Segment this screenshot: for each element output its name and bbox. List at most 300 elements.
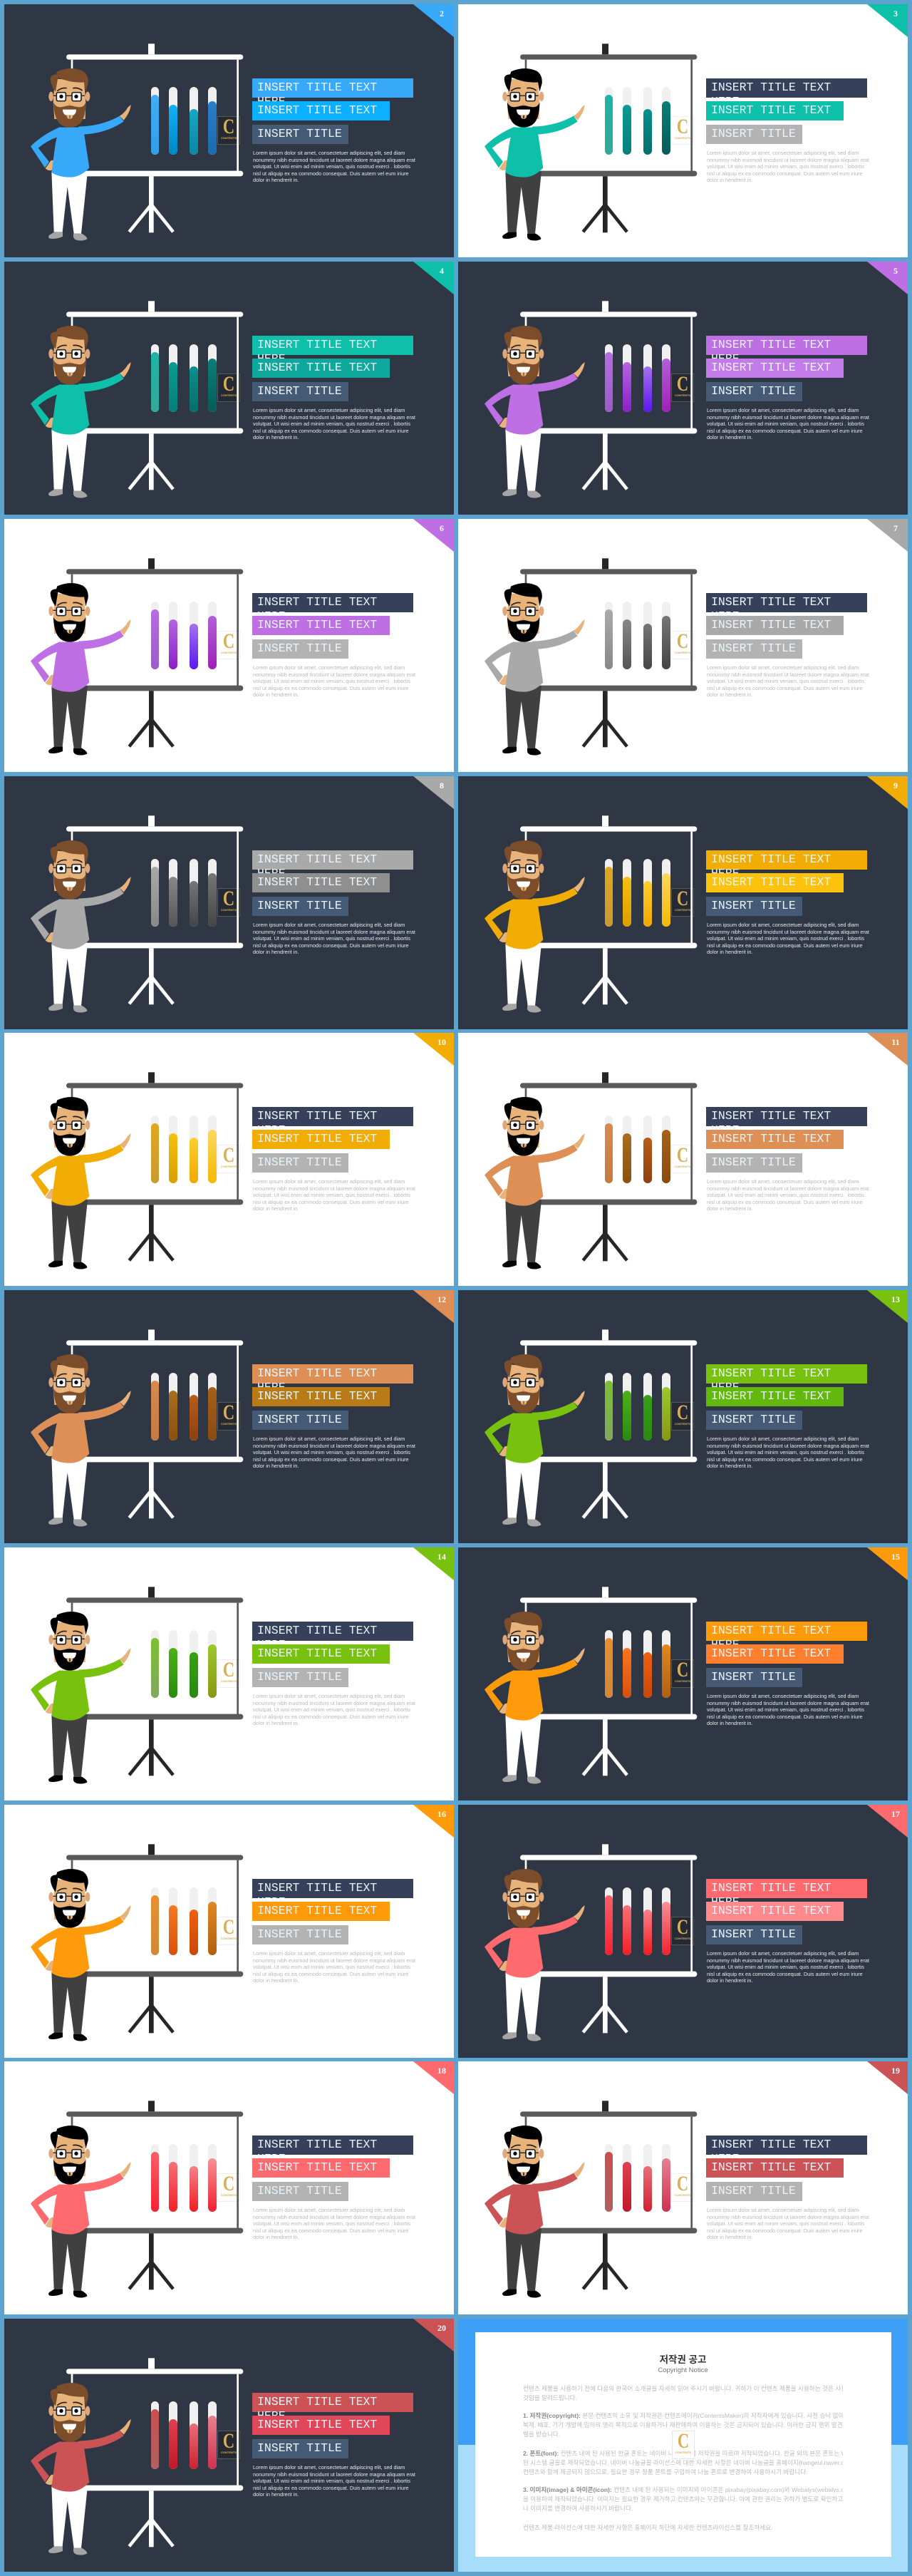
heading bar 3 <box>252 2439 348 2458</box>
bar chart <box>605 1887 670 1955</box>
body text: nonummy nibh euismod tincidunt ut laoreet dolore magna aliquam erat <box>253 2214 415 2220</box>
body text: nonummy nibh euismod tincidunt ut laoreet dolore magna aliquam erat <box>707 929 869 935</box>
body text: dolor in hendrerit in. <box>707 949 752 955</box>
bar chart <box>605 2144 670 2212</box>
corner tag: page 12 <box>413 1290 454 1323</box>
corner tag: page 7: 7 <box>893 523 898 533</box>
illustration: presenter at screen <box>484 301 697 498</box>
body text: dolor in hendrerit in. <box>253 2234 299 2240</box>
body text: Lorem ipsum dolor sit amet, consectetuer adipiscing elit, sed diam <box>253 2464 405 2471</box>
logo badge <box>217 1145 240 1173</box>
body text: nisl ut aliquip ex ea commodo consequat. Duis autem vel eum iriure <box>253 1971 409 1977</box>
logo badge <box>671 631 694 659</box>
heading bar 2 <box>252 359 390 378</box>
corner tag: page 19 <box>867 2061 908 2094</box>
body text: nonummy nibh euismod tincidunt ut laoreet dolore magna aliquam erat <box>253 1700 415 1706</box>
heading bar 1: INSERT TITLE TEXT HERE <box>257 595 377 623</box>
illustration: presenter at screen <box>458 1290 908 1543</box>
logo badge: CONTENTS <box>221 2451 237 2454</box>
heading bar 3: INSERT TITLE <box>711 1413 796 1426</box>
heading bar 3: INSERT TITLE <box>711 1927 796 1941</box>
logo badge <box>217 888 240 917</box>
logo badge <box>671 1659 694 1688</box>
heading bar 1 <box>252 2393 413 2412</box>
heading bar 1 <box>252 1107 413 1126</box>
heading bar 3 <box>706 2182 802 2201</box>
white notice card <box>475 2332 891 2557</box>
logo badge: CONTENTS <box>221 651 237 654</box>
illustration: presenter at screen <box>484 1072 697 1269</box>
body text <box>707 1436 869 1470</box>
body text: volutpat. Ut wisi enim ad minim veniam, quis nostrud exerci . lobortis <box>253 163 410 170</box>
heading bar 1: INSERT TITLE TEXT HERE <box>711 852 831 880</box>
illustration: presenter at screen <box>31 43 244 241</box>
body text: dolor in hendrerit in. <box>253 1977 299 1984</box>
corner tag: page 20: 20 <box>437 2323 446 2333</box>
corner tag: page 16 <box>413 1805 454 1838</box>
logo badge: CONTENTS <box>221 1422 237 1426</box>
heading bar 2 <box>706 1130 844 1149</box>
body text: Lorem ipsum dolor sit amet, consectetuer adipiscing elit, sed diam <box>253 1436 405 1442</box>
heading bar 1: INSERT TITLE TEXT HERE <box>711 1881 831 1909</box>
body text: volutpat. Ut wisi enim ad minim veniam, quis nostrud exerci . lobortis <box>253 2478 410 2484</box>
heading bar 2: INSERT TITLE TEXT <box>257 1389 377 1403</box>
heading bar 1: INSERT TITLE TEXT HERE <box>711 338 831 366</box>
panel: slide 19 <box>458 2061 908 2314</box>
body text: volutpat. Ut wisi enim ad minim veniam, quis nostrud exerci . lobortis <box>253 1706 410 1713</box>
heading bar 3 <box>706 1411 802 1430</box>
body text <box>253 1693 415 1727</box>
heading bar 3: INSERT TITLE <box>711 1155 796 1169</box>
heading bar 2: INSERT TITLE TEXT <box>257 103 377 117</box>
heading bar 1: INSERT TITLE TEXT HERE <box>257 338 377 366</box>
body text <box>253 664 415 698</box>
heading bar 2 <box>252 1644 390 1664</box>
heading bar 1 <box>706 1879 867 1898</box>
heading bar 3: INSERT TITLE <box>257 642 342 655</box>
body text: Lorem ipsum dolor sit amet, consectetuer adipiscing elit, sed diam <box>707 1436 859 1442</box>
heading bar 3: INSERT TITLE <box>257 127 342 140</box>
heading bar 1: INSERT TITLE TEXT HERE <box>257 2395 377 2423</box>
heading bar 3 <box>252 2182 348 2201</box>
body text: nonummy nibh euismod tincidunt ut laoreet dolore magna aliquam erat <box>253 671 415 678</box>
corner tag: page 10 <box>413 1033 454 1066</box>
heading bar 1: INSERT TITLE TEXT HERE <box>711 81 831 108</box>
heading bar 3 <box>706 382 802 401</box>
body text: volutpat. Ut wisi enim ad minim veniam, quis nostrud exerci . lobortis <box>253 678 410 684</box>
heading bar 3: INSERT TITLE <box>257 2184 342 2198</box>
body text: dolor in hendrerit in. <box>253 1463 299 1469</box>
heading bar 3: INSERT TITLE <box>257 2441 342 2455</box>
body text: Lorem ipsum dolor sit amet, consectetuer adipiscing elit, sed diam <box>707 922 859 928</box>
body text <box>707 2207 869 2241</box>
body text: nisl ut aliquip ex ea commodo consequat. Duis autem vel eum iriure <box>707 1199 863 1205</box>
panel: slide 3 <box>458 4 908 257</box>
corner tag: page 16: 16 <box>437 1809 446 1819</box>
body text: nisl ut aliquip ex ea commodo consequat. Duis autem vel eum iriure <box>253 1456 409 1463</box>
heading bar 3 <box>706 1925 802 1944</box>
body text: dolor in hendrerit in. <box>253 177 299 183</box>
heading bar 3 <box>706 1153 802 1173</box>
panel: slide 4 <box>4 262 454 515</box>
heading bar 2: INSERT TITLE TEXT <box>711 875 831 889</box>
heading bar 1 <box>706 850 867 870</box>
body text: dolor in hendrerit in. <box>707 1205 752 1212</box>
panel: slide 17 <box>458 1805 908 2058</box>
heading bar 1 <box>252 78 413 98</box>
panel: slide 5 <box>458 262 908 515</box>
logo badge <box>217 116 240 145</box>
corner tag: page 17: 17 <box>891 1809 900 1819</box>
body text: Lorem ipsum dolor sit amet, consectetuer adipiscing elit, sed diam <box>707 1950 859 1957</box>
heading bar 2 <box>706 1644 844 1664</box>
heading bar 1: INSERT TITLE TEXT HERE <box>257 852 377 880</box>
panel: slide 13 <box>458 1290 908 1543</box>
heading bar 1: INSERT TITLE TEXT HERE <box>711 1366 831 1394</box>
heading bar 2 <box>252 101 390 120</box>
bar chart <box>605 344 670 412</box>
body text: nisl ut aliquip ex ea commodo consequat. Duis autem vel eum iriure <box>253 942 409 949</box>
heading bar 3 <box>706 897 802 916</box>
heading bar 2 <box>252 1130 390 1149</box>
corner tag: page 9 <box>867 776 908 809</box>
body text: Lorem ipsum dolor sit amet, consectetuer adipiscing elit, sed diam <box>253 1950 405 1957</box>
heading bar 2: INSERT TITLE TEXT <box>711 103 831 117</box>
panel: copyright notice <box>458 2319 908 2572</box>
body text: Lorem ipsum dolor sit amet, consectetuer adipiscing elit, sed diam <box>253 2207 405 2213</box>
corner tag: page 11: 11 <box>891 1037 900 1047</box>
corner tag: page 8 <box>413 776 454 809</box>
body text <box>253 1178 415 1212</box>
corner tag: page 5 <box>867 262 908 294</box>
heading bar 1 <box>706 1107 867 1126</box>
corner tag: page 3: 3 <box>893 9 898 19</box>
heading bar 3: INSERT TITLE <box>257 1413 342 1426</box>
panel: slide 8 <box>4 776 454 1029</box>
notice clause 2: 컨텐츠와 함께 제공되지 않으므로, 필요한 경우 정품 폰트를 구입하여 나눔 폰트로 변경하여 사용하시기 바랍니다. <box>523 2468 808 2475</box>
body text: nonummy nibh euismod tincidunt ut laoreet dolore magna aliquam erat <box>253 1957 415 1964</box>
logo badge <box>671 2173 694 2202</box>
corner tag: page 17 <box>867 1805 908 1838</box>
body text: volutpat. Ut wisi enim ad minim veniam, quis nostrud exerci . lobortis <box>707 678 864 684</box>
body text: nonummy nibh euismod tincidunt ut laoreet dolore magna aliquam erat <box>707 1185 869 1192</box>
body text: volutpat. Ut wisi enim ad minim veniam, quis nostrud exerci . lobortis <box>253 1192 410 1198</box>
body text: nisl ut aliquip ex ea commodo consequat. Duis autem vel eum iriure <box>253 1714 409 1720</box>
logo badge <box>671 1145 694 1173</box>
body text: dolor in hendrerit in. <box>253 1720 299 1726</box>
body text: nonummy nibh euismod tincidunt ut laoreet dolore magna aliquam erat <box>707 1443 869 1449</box>
heading bar 3: INSERT TITLE <box>711 127 796 140</box>
logo badge <box>217 373 240 402</box>
corner tag: page 15: 15 <box>891 1552 900 1562</box>
body text: volutpat. Ut wisi enim ad minim veniam, quis nostrud exerci . lobortis <box>253 421 410 427</box>
corner tag: page 2: 2 <box>440 9 444 19</box>
bar chart <box>151 1116 217 1183</box>
body text <box>253 1950 415 1984</box>
bar chart <box>151 87 217 155</box>
heading bar 1: INSERT TITLE TEXT HERE <box>711 1109 831 1137</box>
notice intro: 것임을 알려드립니다. <box>523 2394 577 2401</box>
heading bar 2 <box>706 359 844 378</box>
body text: Lorem ipsum dolor sit amet, consectetuer adipiscing elit, sed diam <box>253 664 405 671</box>
heading bar 1 <box>706 593 867 612</box>
heading bar 1: INSERT TITLE TEXT HERE <box>257 2138 377 2165</box>
heading bar 3 <box>252 1925 348 1944</box>
bar chart <box>151 2144 217 2212</box>
bar chart <box>151 859 217 927</box>
logo badge <box>672 2431 695 2459</box>
heading bar 1 <box>252 2135 413 2155</box>
body text: Lorem ipsum dolor sit amet, consectetuer adipiscing elit, sed diam <box>253 922 405 928</box>
illustration: presenter at screen <box>4 1290 454 1543</box>
bar chart <box>605 87 670 155</box>
bar chart <box>151 1887 217 1955</box>
heading bar 1 <box>252 593 413 612</box>
corner tag: page 13: 13 <box>891 1294 900 1304</box>
illustration: presenter at screen <box>31 815 244 1012</box>
illustration: presenter at screen <box>458 1805 908 2058</box>
body text: nonummy nibh euismod tincidunt ut laoreet dolore magna aliquam erat <box>253 414 415 421</box>
illustration: presenter at screen <box>31 558 244 756</box>
heading bar 3: INSERT TITLE <box>711 899 796 912</box>
illustration: presenter at screen <box>31 301 244 498</box>
logo badge: CONTENTS <box>221 908 237 912</box>
notice clause 3 <box>523 2485 843 2513</box>
illustration: presenter at screen <box>458 2061 908 2314</box>
heading bar 3: INSERT TITLE <box>257 1155 342 1169</box>
body text: nisl ut aliquip ex ea commodo consequat. Duis autem vel eum iriure <box>707 170 863 177</box>
body text: volutpat. Ut wisi enim ad minim veniam, quis nostrud exerci . lobortis <box>253 1964 410 1970</box>
body text: nisl ut aliquip ex ea commodo consequat. Duis autem vel eum iriure <box>707 2227 863 2234</box>
corner tag: page 9: 9 <box>893 780 898 790</box>
body text: Lorem ipsum dolor sit amet, consectetuer adipiscing elit, sed diam <box>707 664 859 671</box>
heading bar 1 <box>706 78 867 98</box>
heading bar 2: INSERT TITLE TEXT <box>711 1904 831 1917</box>
heading bar 3: INSERT TITLE <box>257 1927 342 1941</box>
heading bar 1: INSERT TITLE TEXT HERE <box>257 1109 377 1137</box>
illustration: presenter at screen <box>484 43 697 241</box>
body text <box>253 2207 415 2241</box>
logo badge: CONTENTS <box>675 908 690 912</box>
body text: nisl ut aliquip ex ea commodo consequat. Duis autem vel eum iriure <box>253 428 409 434</box>
body text <box>707 1178 869 1212</box>
panel: slide 16 <box>4 1805 454 2058</box>
logo badge: CONTENTS <box>675 651 690 654</box>
logo badge: CONTENTS <box>221 136 237 140</box>
heading bar 1 <box>252 1622 413 1641</box>
notice intro <box>523 2384 843 2403</box>
panel: slide 18 <box>4 2061 454 2314</box>
body text: nisl ut aliquip ex ea commodo consequat. Duis autem vel eum iriure <box>707 1456 863 1463</box>
illustration: presenter at screen <box>4 1547 454 1800</box>
body text <box>707 1950 869 1984</box>
heading bar 1 <box>252 336 413 355</box>
heading bar 3: INSERT TITLE <box>711 384 796 398</box>
heading bar 2 <box>252 616 390 635</box>
logo badge <box>217 1917 240 1945</box>
heading bar 3 <box>252 382 348 401</box>
panel: slide 20 <box>4 2319 454 2572</box>
body text <box>707 1693 869 1727</box>
bar chart <box>605 1630 670 1698</box>
illustration: presenter at screen <box>4 2319 454 2572</box>
body text: nisl ut aliquip ex ea commodo consequat. Duis autem vel eum iriure <box>707 942 863 949</box>
body text: volutpat. Ut wisi enim ad minim veniam, quis nostrud exerci . lobortis <box>253 935 410 942</box>
corner tag: page 12: 12 <box>437 1294 446 1304</box>
body text: dolor in hendrerit in. <box>253 949 299 955</box>
heading bar 1 <box>706 1622 867 1641</box>
body text: Lorem ipsum dolor sit amet, consectetuer adipiscing elit, sed diam <box>707 150 859 156</box>
corner tag: page 4 <box>413 262 454 294</box>
corner tag: page 4: 4 <box>440 266 444 276</box>
illustration: presenter at screen <box>31 1072 244 1269</box>
corner tag: page 18 <box>413 2061 454 2094</box>
illustration: presenter at screen <box>484 815 697 1012</box>
bar chart <box>151 344 217 412</box>
heading bar 1 <box>252 1364 413 1384</box>
corner tag: page 19: 19 <box>891 2066 900 2076</box>
logo badge: CONTENTS <box>221 1937 237 1940</box>
body text <box>253 2464 415 2498</box>
heading bar 3 <box>252 125 348 144</box>
heading bar 2 <box>706 1902 844 1921</box>
body text: nonummy nibh euismod tincidunt ut laoreet dolore magna aliquam erat <box>707 1957 869 1964</box>
heading bar 2: INSERT TITLE TEXT <box>257 2160 377 2174</box>
heading bar 2 <box>706 101 844 120</box>
bar chart <box>605 1373 670 1441</box>
body text: nisl ut aliquip ex ea commodo consequat. Duis autem vel eum iriure <box>253 685 409 691</box>
body text <box>253 1436 415 1470</box>
panel: slide 14 <box>4 1547 454 1800</box>
notice clause 3: 나 이미지를 변경하여 사용하시기 바랍니다. <box>523 2505 633 2512</box>
heading bar 1 <box>706 336 867 355</box>
panel: slide 15 <box>458 1547 908 1800</box>
body text: nisl ut aliquip ex ea commodo consequat. Duis autem vel eum iriure <box>707 428 863 434</box>
heading bar 1: INSERT TITLE TEXT HERE <box>711 595 831 623</box>
heading bar 1: INSERT TITLE TEXT HERE <box>711 2138 831 2165</box>
body text: volutpat. Ut wisi enim ad minim veniam, quis nostrud exerci . lobortis <box>707 1964 864 1970</box>
heading bar 2 <box>706 2158 844 2178</box>
logo badge: CONTENTS <box>675 1165 690 1168</box>
logo badge: CONTENTS <box>675 1679 690 1683</box>
illustration: presenter at screen <box>4 1805 454 2058</box>
body text: nisl ut aliquip ex ea commodo consequat. Duis autem vel eum iriure <box>253 2485 409 2491</box>
body text: dolor in hendrerit in. <box>253 434 299 441</box>
body text: nonummy nibh euismod tincidunt ut laoreet dolore magna aliquam erat <box>253 2471 415 2478</box>
logo badge: CONTENTS <box>675 1422 690 1426</box>
body text: nonummy nibh euismod tincidunt ut laoreet dolore magna aliquam erat <box>253 929 415 935</box>
body text: nisl ut aliquip ex ea commodo consequat. Duis autem vel eum iriure <box>707 685 863 691</box>
body text: nonummy nibh euismod tincidunt ut laoreet dolore magna aliquam erat <box>707 2214 869 2220</box>
logo badge <box>671 1402 694 1431</box>
heading bar 2: INSERT TITLE TEXT <box>257 875 377 889</box>
heading bar 2 <box>252 1387 390 1406</box>
heading bar 1: INSERT TITLE TEXT HERE <box>257 1366 377 1394</box>
logo badge: CONTENTS <box>675 2451 691 2454</box>
notice title: 저작권 공고 <box>660 2354 706 2365</box>
heading bar 3 <box>706 125 802 144</box>
body text <box>253 407 415 441</box>
heading bar 2 <box>252 1902 390 1921</box>
logo badge: CONTENTS <box>221 2193 237 2197</box>
corner tag: page 14: 14 <box>437 1552 446 1562</box>
body text: dolor in hendrerit in. <box>707 1463 752 1469</box>
body text: dolor in hendrerit in. <box>707 177 752 183</box>
body text: volutpat. Ut wisi enim ad minim veniam, quis nostrud exerci . lobortis <box>253 2220 410 2227</box>
body text <box>707 922 869 955</box>
heading bar 2: INSERT TITLE TEXT <box>711 618 831 632</box>
bar chart <box>605 859 670 927</box>
body text: volutpat. Ut wisi enim ad minim veniam, quis nostrud exerci . lobortis <box>707 1449 864 1456</box>
bar chart <box>151 602 217 669</box>
heading bar 2 <box>706 873 844 892</box>
notice clause 1: 벌을 받습니다. <box>523 2431 560 2438</box>
logo badge: CONTENTS <box>221 1679 237 1683</box>
heading bar 2: INSERT TITLE TEXT <box>711 1647 831 1660</box>
panel: slide 11 <box>458 1033 908 1286</box>
bar chart <box>151 2401 217 2469</box>
logo badge: CONTENTS <box>221 393 237 397</box>
body text: dolor in hendrerit in. <box>253 2491 299 2498</box>
logo badge <box>217 1659 240 1688</box>
body text: nisl ut aliquip ex ea commodo consequat. Duis autem vel eum iriure <box>253 170 409 177</box>
body text: Lorem ipsum dolor sit amet, consectetuer adipiscing elit, sed diam <box>707 2207 859 2213</box>
body text <box>253 150 415 183</box>
panel: slide 12 <box>4 1290 454 1543</box>
corner tag: page 15 <box>867 1547 908 1580</box>
body text: volutpat. Ut wisi enim ad minim veniam, quis nostrud exerci . lobortis <box>707 1192 864 1198</box>
corner tag: page 8: 8 <box>440 780 444 790</box>
heading bar 3 <box>252 1411 348 1430</box>
body text: Lorem ipsum dolor sit amet, consectetuer adipiscing elit, sed diam <box>253 150 405 156</box>
bar chart <box>151 1373 217 1441</box>
heading bar 3 <box>252 1153 348 1173</box>
heading bar 3: INSERT TITLE <box>711 2184 796 2198</box>
body text: nonummy nibh euismod tincidunt ut laoreet dolore magna aliquam erat <box>707 671 869 678</box>
heading bar 3: INSERT TITLE <box>257 899 342 912</box>
corner tag: page 18: 18 <box>437 2066 446 2076</box>
body text: volutpat. Ut wisi enim ad minim veniam, quis nostrud exerci . lobortis <box>707 163 864 170</box>
logo badge <box>217 631 240 659</box>
heading bar 3 <box>706 1668 802 1687</box>
body text: nisl ut aliquip ex ea commodo consequat. Duis autem vel eum iriure <box>707 1714 863 1720</box>
logo badge: CONTENTS <box>675 1937 690 1940</box>
body text: dolor in hendrerit in. <box>253 691 299 698</box>
body text: Lorem ipsum dolor sit amet, consectetuer adipiscing elit, sed diam <box>707 1693 859 1699</box>
bar chart <box>151 1630 217 1698</box>
heading bar 2: INSERT TITLE TEXT <box>257 1904 377 1917</box>
body text: Lorem ipsum dolor sit amet, consectetuer adipiscing elit, sed diam <box>253 1178 405 1185</box>
notice license line: 컨텐츠 제품 라이선스에 대한 자세한 사항은 홈페이지 하단에 자세한 컨텐츠라이선스를 참조하세요. <box>523 2523 772 2530</box>
corner tag: page 10: 10 <box>437 1037 446 1047</box>
heading bar 2: INSERT TITLE TEXT <box>711 1389 831 1403</box>
body text: Lorem ipsum dolor sit amet, consectetuer adipiscing elit, sed diam <box>707 407 859 413</box>
notice clause 2 <box>523 2449 843 2477</box>
body text: nonummy nibh euismod tincidunt ut laoreet dolore magna aliquam erat <box>253 157 415 163</box>
heading bar 3 <box>252 897 348 916</box>
body text: nonummy nibh euismod tincidunt ut laoreet dolore magna aliquam erat <box>707 157 869 163</box>
illustration: presenter at screen <box>484 558 697 756</box>
logo badge <box>671 116 694 145</box>
heading bar 2 <box>252 2416 390 2435</box>
corner tag: page 20 <box>413 2319 454 2351</box>
heading bar 3 <box>706 639 802 659</box>
body text: nonummy nibh euismod tincidunt ut laoreet dolore magna aliquam erat <box>253 1185 415 1192</box>
corner tag: page 7 <box>867 519 908 552</box>
body text: nonummy nibh euismod tincidunt ut laoreet dolore magna aliquam erat <box>707 414 869 421</box>
body text: nonummy nibh euismod tincidunt ut laoreet dolore magna aliquam erat <box>707 1700 869 1706</box>
panel: slide 6 <box>4 519 454 772</box>
